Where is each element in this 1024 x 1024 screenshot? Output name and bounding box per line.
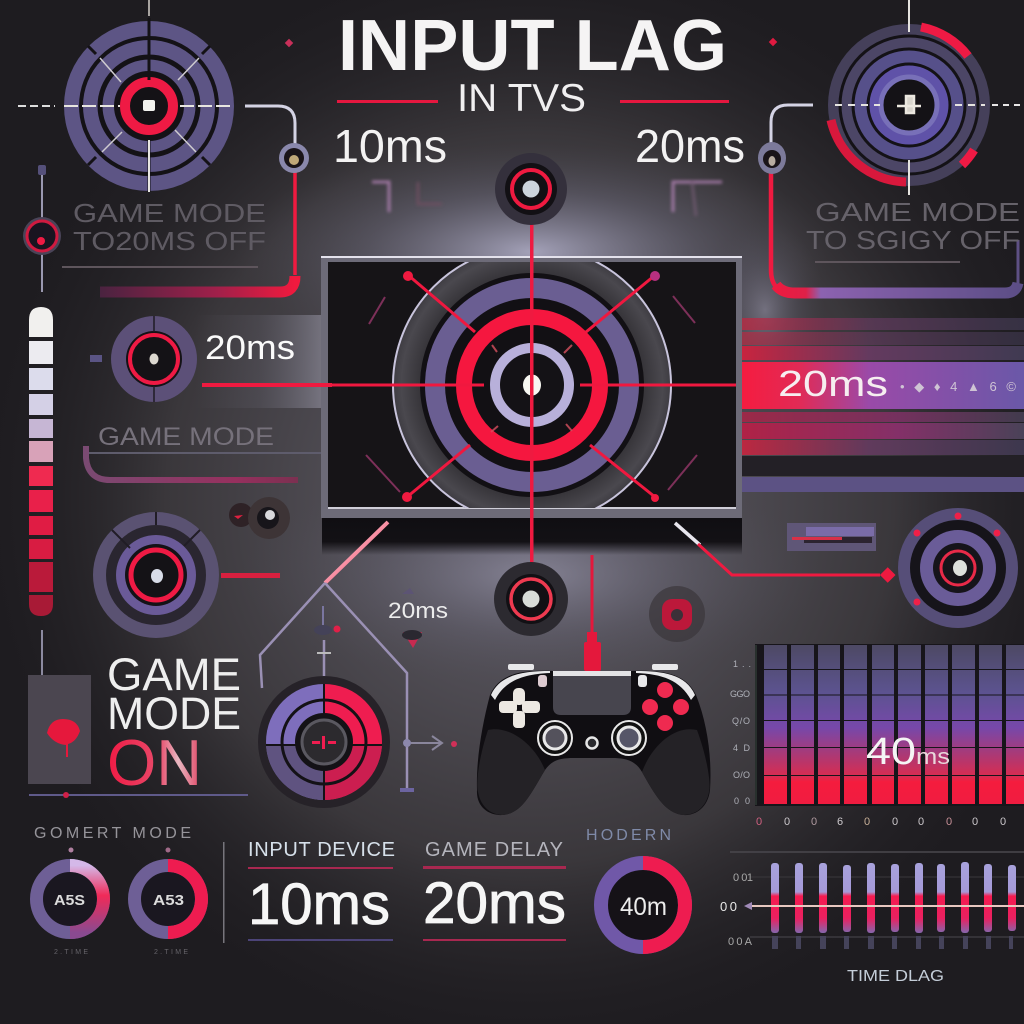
bar chart x axis — [756, 816, 1006, 828]
stat: game delay — [423, 839, 566, 941]
rule under faded text right — [815, 261, 960, 263]
vertical signal line — [530, 209, 534, 581]
donut 1: A5S — [54, 892, 85, 909]
controller: left stick — [538, 721, 572, 755]
connector node: top left — [279, 143, 309, 173]
level meter — [29, 307, 53, 616]
pill chart y axis: 0 01 — [733, 872, 753, 884]
donut 1 — [36, 848, 104, 956]
bar chart x axis: 0 — [918, 816, 924, 828]
bracket under left game mode — [86, 446, 322, 480]
stat: game delay: 20ms — [423, 871, 566, 936]
controller — [477, 664, 710, 815]
game mode card — [28, 630, 91, 784]
connector: top left — [100, 106, 295, 292]
bar chart x axis: 0 — [864, 816, 870, 828]
bar chart y axis: GGO — [730, 689, 750, 699]
bar chart y axis — [730, 645, 756, 806]
connector: stand to right target — [698, 544, 895, 583]
bar chart x axis: 0 — [811, 816, 817, 828]
bar chart — [755, 644, 1024, 806]
pill chart title: TIME DLAG — [847, 968, 944, 985]
target: left lower — [93, 512, 280, 638]
donut 2: 2.TIME — [154, 949, 188, 956]
donut 3 — [601, 863, 685, 947]
subtitle: IN TVS — [457, 77, 586, 120]
bar chart x axis: 0 — [892, 816, 898, 828]
small slider box — [787, 523, 876, 551]
donut 1: 2.TIME — [54, 949, 88, 956]
bar chart y axis: 4 D — [733, 743, 750, 753]
rule under game mode on — [29, 792, 248, 798]
bar chart reading: 40 — [866, 731, 916, 773]
pill chart y axis: 00 — [720, 899, 737, 914]
divider — [223, 842, 224, 943]
label: left 20ms: 20ms — [205, 329, 295, 367]
panel behind left 20ms — [195, 315, 323, 408]
faded text: game mode off left: TO20MS OFF — [73, 226, 266, 256]
small node left — [23, 165, 61, 292]
bar chart reading: ms — [916, 744, 950, 769]
label: modern: HODERN — [586, 827, 671, 844]
horizontal signal line — [202, 383, 332, 387]
stat: input device — [248, 839, 395, 941]
bar chart y axis: 1.. — [733, 659, 751, 669]
label: 10ms: 10ms — [333, 120, 447, 172]
bar chart x axis: 6 — [837, 816, 843, 828]
text: game mode on: GAME — [107, 649, 241, 700]
arrow: right of split target — [403, 736, 457, 750]
top node — [495, 153, 567, 225]
stray markers — [285, 38, 777, 47]
stat: input device: INPUT DEVICE — [248, 839, 395, 861]
controller: action buttons — [642, 682, 689, 731]
controller: touchpad — [553, 671, 631, 715]
target: top left — [18, 0, 234, 192]
bar chart x axis: 0 — [972, 816, 978, 828]
text: game mode on: MODE — [107, 688, 241, 739]
controller cable — [584, 555, 601, 671]
pill chart — [730, 852, 1024, 949]
tv stand leg right — [675, 523, 700, 545]
controller: shoulder buttons — [491, 664, 695, 700]
target: right lower — [898, 508, 1018, 628]
stat: game delay: GAME DELAY — [425, 839, 563, 861]
bar chart x axis: 0 — [946, 816, 952, 828]
donut 2: A53 — [153, 892, 184, 909]
right stripe panel — [742, 318, 1024, 492]
tv — [321, 245, 742, 555]
connector node: top right — [758, 142, 786, 174]
donut 3: 40m — [620, 893, 667, 921]
text: game mode on: ON — [107, 726, 202, 799]
bar chart x axis: 0 — [784, 816, 790, 828]
bar chart y axis: O/O — [733, 770, 750, 780]
bar chart x axis: 0 — [1000, 816, 1006, 828]
bar chart y axis: Q/O — [732, 716, 750, 726]
stripe glyph row: • ◆ ♦ 4 ▲ 6 © — [900, 379, 1016, 394]
split target — [258, 676, 390, 808]
donut 2 — [134, 848, 202, 956]
controller: center button — [586, 738, 598, 748]
faded text: game mode off left — [73, 198, 266, 256]
connector: top right — [771, 105, 1018, 293]
target: top right — [828, 0, 1020, 195]
subtitle rules — [337, 100, 729, 103]
label: center 20ms: 20ms — [388, 598, 448, 623]
stat: input device: 10ms — [248, 872, 390, 937]
label: gomert mode: GOMERT MODE — [34, 825, 191, 842]
faint marks under readings — [372, 182, 722, 216]
pill chart y axis — [720, 872, 753, 948]
bar chart x axis: 0 — [756, 816, 762, 828]
faint red node — [649, 586, 705, 642]
target: left middle — [90, 316, 197, 402]
bar chart y axis: 0 0 — [734, 796, 750, 806]
tv screen: concentric target — [332, 262, 736, 508]
bottom node — [494, 562, 568, 636]
tv stand leg left — [325, 522, 388, 583]
controller: d-pad — [499, 688, 540, 728]
title: INPUT LAG — [338, 6, 727, 86]
faded text: game mode off right: GAME MODE — [815, 197, 1020, 227]
label: left game mode: GAME MODE — [98, 423, 274, 451]
bar chart reading — [866, 731, 950, 773]
faded text: game mode off left: GAME MODE — [73, 198, 266, 228]
text: game mode on — [107, 649, 241, 799]
faded text: game mode off right: TO SGIGY OFF — [806, 225, 1020, 255]
label: stripe 20ms: 20ms — [778, 363, 888, 404]
outlined connectors around split target — [260, 583, 414, 790]
faded text: game mode off right — [806, 197, 1020, 255]
label: 20ms: 20ms — [635, 120, 745, 172]
knob — [229, 497, 290, 539]
controller: right stick — [612, 721, 646, 755]
decoration around 20ms — [402, 588, 422, 648]
rule under faded text left — [62, 266, 258, 268]
small icon above split target — [314, 606, 340, 654]
pill chart y axis: 00A — [728, 936, 753, 948]
